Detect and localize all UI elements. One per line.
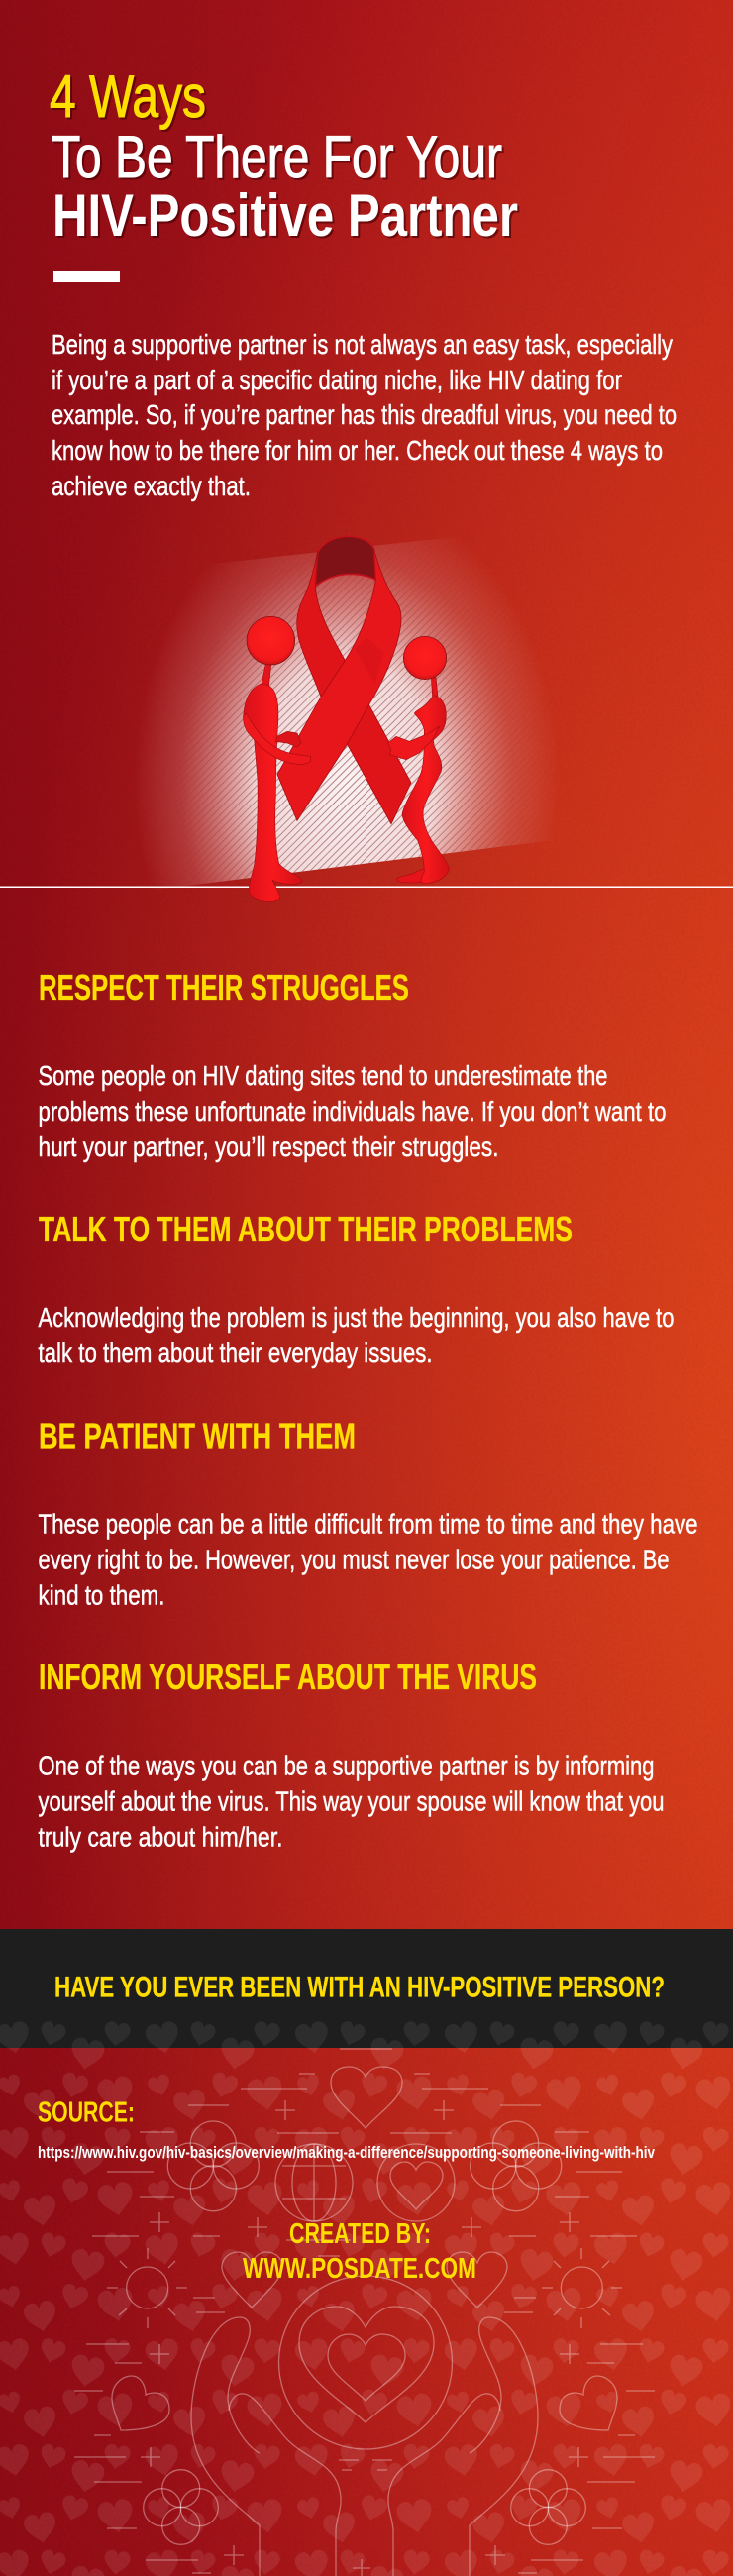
body 1: hurt your partner, you’ll respect their struggles. [38, 1131, 499, 1162]
section 2: talk to them about their problems [38, 1209, 674, 1368]
body 2: talk to them about their everyday issues. [38, 1338, 432, 1368]
striped glowing panel [143, 539, 551, 889]
body 1: Some people on HIV dating sites tend to underestimate the [38, 1060, 608, 1091]
body 2 [38, 1302, 674, 1368]
intro paragraph [52, 329, 677, 501]
intro paragraph: achieve exactly that. [52, 471, 251, 501]
body 3 [38, 1508, 697, 1611]
figure: left person [244, 616, 310, 901]
body 1 [38, 1060, 666, 1162]
title [50, 63, 518, 249]
created by label: CREATED BY: [289, 2218, 431, 2250]
line art: hands holding heart [74, 2049, 655, 2576]
middle heart outline [299, 2307, 434, 2422]
section 1: respect their struggles [38, 967, 666, 1162]
body 4 [38, 1750, 664, 1853]
inner heart outline [328, 2334, 405, 2401]
top centre heart outline [331, 2067, 402, 2128]
globe [275, 2144, 353, 2221]
body 3: kind to them. [38, 1579, 164, 1611]
right half line art (mirrored) [388, 2074, 655, 2576]
dark question band [0, 1929, 733, 2048]
body 4: truly care about him/her. [38, 1821, 283, 1853]
awareness ribbon [277, 536, 411, 824]
created by block [243, 2218, 476, 2285]
heading 4: INFORM YOURSELF ABOUT THE VIRUS [39, 1657, 537, 1697]
title line: HIV-Positive Partner: HIV-Positive Partner [52, 182, 518, 249]
left half line art [74, 2074, 341, 2576]
large centre circle [279, 2276, 452, 2449]
figure: right person [388, 636, 449, 884]
divider line under hero [0, 886, 733, 888]
source label: SOURCE: [38, 2096, 135, 2128]
hero illustration: striped panel, ribbon and figures [0, 521, 733, 901]
heart pattern background [0, 2017, 733, 2576]
section 3: be patient with them [38, 1415, 697, 1611]
section 4: inform yourself about the virus [38, 1657, 664, 1853]
website: WWW.POSDATE.COM [243, 2253, 476, 2285]
white title divider bar [53, 271, 120, 282]
centre circle with heart [377, 2144, 455, 2221]
heading 1: RESPECT THEIR STRUGGLES [39, 967, 409, 1008]
title line: To Be There For Your: To Be There For Your [52, 124, 502, 190]
centre small marks [286, 2049, 392, 2576]
title line: 4 Ways: 4 Ways [50, 63, 206, 130]
heading 3: BE PATIENT WITH THEM [39, 1415, 356, 1456]
source block [38, 2096, 655, 2162]
